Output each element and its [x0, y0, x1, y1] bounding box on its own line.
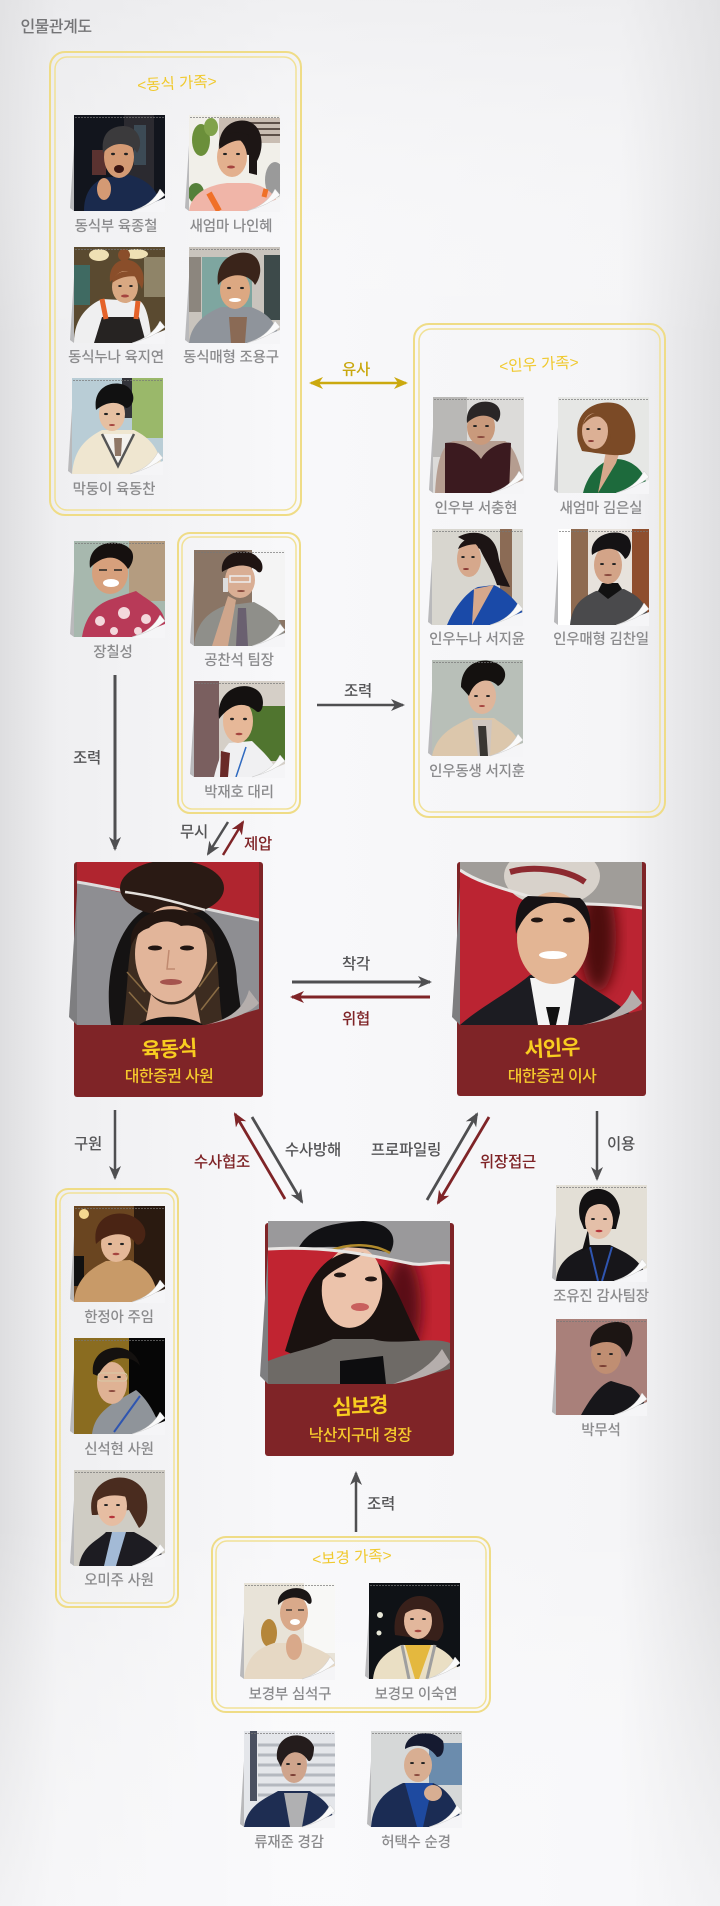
- card: 박무석: [552, 1319, 647, 1439]
- role: 낙산지구대 경장: [309, 1426, 412, 1444]
- arrow: 유사: [311, 360, 406, 383]
- panel: 인우 가족: [414, 324, 665, 817]
- portrait: [260, 1221, 450, 1384]
- portrait: [68, 378, 163, 475]
- name: 동식매형 조용구: [183, 349, 279, 366]
- heading: 보경 가족: <보경 가족>: [312, 1546, 392, 1569]
- portrait: [365, 1583, 460, 1680]
- portrait: [452, 846, 642, 1025]
- portrait: [69, 860, 259, 1025]
- portrait: [367, 1731, 462, 1828]
- panel: 보경 가족: [212, 1537, 490, 1712]
- card: 신석현 사원: [70, 1338, 165, 1458]
- arrow: 수사협조: [194, 1114, 285, 1199]
- name: 새엄마 김은실: [560, 500, 642, 517]
- role: 대한증권 이사: [508, 1068, 597, 1086]
- name: 한정아 주임: [84, 1309, 154, 1326]
- main card: 심보경: [260, 1221, 454, 1456]
- title: 인물관계도: [20, 18, 92, 36]
- card: 오미주 사원: [70, 1470, 165, 1589]
- label: 제압: [244, 835, 272, 853]
- portrait: [428, 660, 523, 757]
- heading: 인우 가족: <인우 가족>: [499, 353, 579, 376]
- label: 유사: 유사: [342, 360, 370, 378]
- label: 착각: [342, 955, 370, 973]
- portrait: [70, 541, 165, 638]
- card: 인우매형 김찬일: [553, 529, 649, 648]
- arrow: 착각: [292, 955, 430, 982]
- name: 보경모 이숙연: [375, 1686, 457, 1703]
- arrow: 수사방해: [252, 1117, 341, 1202]
- label: 구원: [74, 1135, 102, 1153]
- name: 인우누나 서지윤: [429, 631, 525, 648]
- card: 막둥이 육동찬: [68, 378, 163, 498]
- label: 위협: [342, 1010, 370, 1028]
- card: 동식누나 육지연: [68, 247, 165, 366]
- name: 막둥이 육동찬: [73, 481, 155, 498]
- arrow: 이용: [597, 1111, 635, 1179]
- card: 류재준 경감: [240, 1731, 335, 1851]
- card: 허택수 순경: [367, 1731, 462, 1851]
- card: 동식매형 조용구: [183, 247, 280, 366]
- portrait: [552, 1185, 647, 1282]
- card: 인우동생 서지훈: [428, 660, 525, 780]
- arrow: 조력 to 인우 가족: [317, 682, 403, 705]
- portrait: [185, 115, 285, 212]
- heading: 동식 가족: <동식 가족>: [137, 72, 217, 95]
- card: 조유진 감사팀장: [552, 1185, 649, 1305]
- name: 신석현 사원: [84, 1441, 154, 1458]
- name: 공찬석 팀장: [204, 652, 274, 669]
- arrow: 프로파일링: [371, 1114, 477, 1200]
- arrow: 위협: [292, 997, 430, 1028]
- label: 조력: [344, 682, 372, 700]
- portrait: [554, 529, 649, 626]
- portrait: [190, 681, 285, 778]
- name: 새엄마 나인혜: [190, 218, 272, 235]
- card: 새엄마 나인혜: [185, 115, 285, 235]
- portrait: [552, 1319, 647, 1416]
- label: 수사협조: [194, 1153, 250, 1171]
- portrait: [70, 1206, 165, 1303]
- name: 허택수 순경: [381, 1834, 451, 1851]
- card: 공찬석 팀장: [190, 550, 285, 669]
- name: 박재호 대리: [204, 784, 274, 801]
- name: 인우동생 서지훈: [429, 763, 525, 780]
- portrait: [429, 397, 524, 494]
- portrait: [240, 1583, 335, 1680]
- card: 새엄마 김은실: [554, 397, 649, 517]
- card: 박재호 대리: [190, 681, 285, 801]
- arrow: 무시: [180, 822, 228, 854]
- label: 이용: [607, 1135, 635, 1153]
- label: 조력: [367, 1495, 395, 1513]
- handwritten name: 심보경: [332, 1394, 388, 1420]
- portrait: [554, 397, 649, 494]
- card: 인우부 서충현: [429, 397, 524, 517]
- panel: 동식 가족: [50, 52, 301, 515]
- card: 보경모 이숙연: [365, 1583, 460, 1703]
- portrait: [70, 1338, 165, 1435]
- name: 인우매형 김찬일: [553, 631, 649, 648]
- portrait: [185, 247, 280, 344]
- portrait: [70, 247, 165, 344]
- label: 위장접근: [480, 1153, 536, 1171]
- name: 장칠성: [93, 644, 133, 661]
- portrait: [70, 115, 165, 212]
- label: 수사방해: [285, 1141, 341, 1159]
- name: 동식누나 육지연: [68, 349, 164, 366]
- arrow: 조력 to 심보경: [356, 1473, 395, 1532]
- portrait: [190, 550, 285, 647]
- name: 류재준 경감: [254, 1834, 324, 1851]
- name: 인우부 서충현: [435, 500, 517, 517]
- main card: 서인우: [452, 846, 646, 1096]
- label: 프로파일링: [371, 1141, 441, 1159]
- card: 인우누나 서지윤: [428, 529, 525, 648]
- name: 보경부 심석구: [249, 1686, 331, 1703]
- arrow: 제압: [223, 822, 272, 855]
- label: 조력: [73, 749, 101, 767]
- label: 무시: [180, 824, 208, 841]
- name: 조유진 감사팀장: [553, 1288, 649, 1305]
- card: 장칠성: [70, 541, 165, 661]
- arrow: 위장접근: [438, 1117, 536, 1203]
- main card: 육동식: [69, 860, 263, 1097]
- portrait: [428, 529, 523, 626]
- name: 오미주 사원: [84, 1572, 154, 1589]
- card: 보경부 심석구: [240, 1583, 335, 1703]
- card: 한정아 주임: [70, 1206, 165, 1326]
- card: 동식부 육종철: [70, 115, 165, 235]
- panel: 회사 팀: [178, 533, 300, 813]
- name: 박무석: [581, 1422, 621, 1439]
- role: 대한증권 사원: [125, 1068, 213, 1086]
- panel: 동식 동료: [56, 1189, 178, 1607]
- portrait: [70, 1470, 165, 1567]
- handwritten name: 육동식: [141, 1037, 197, 1063]
- name: 동식부 육종철: [75, 218, 157, 235]
- handwritten name: 서인우: [524, 1036, 581, 1062]
- portrait: [240, 1731, 335, 1828]
- arrow: 구원: [74, 1110, 115, 1178]
